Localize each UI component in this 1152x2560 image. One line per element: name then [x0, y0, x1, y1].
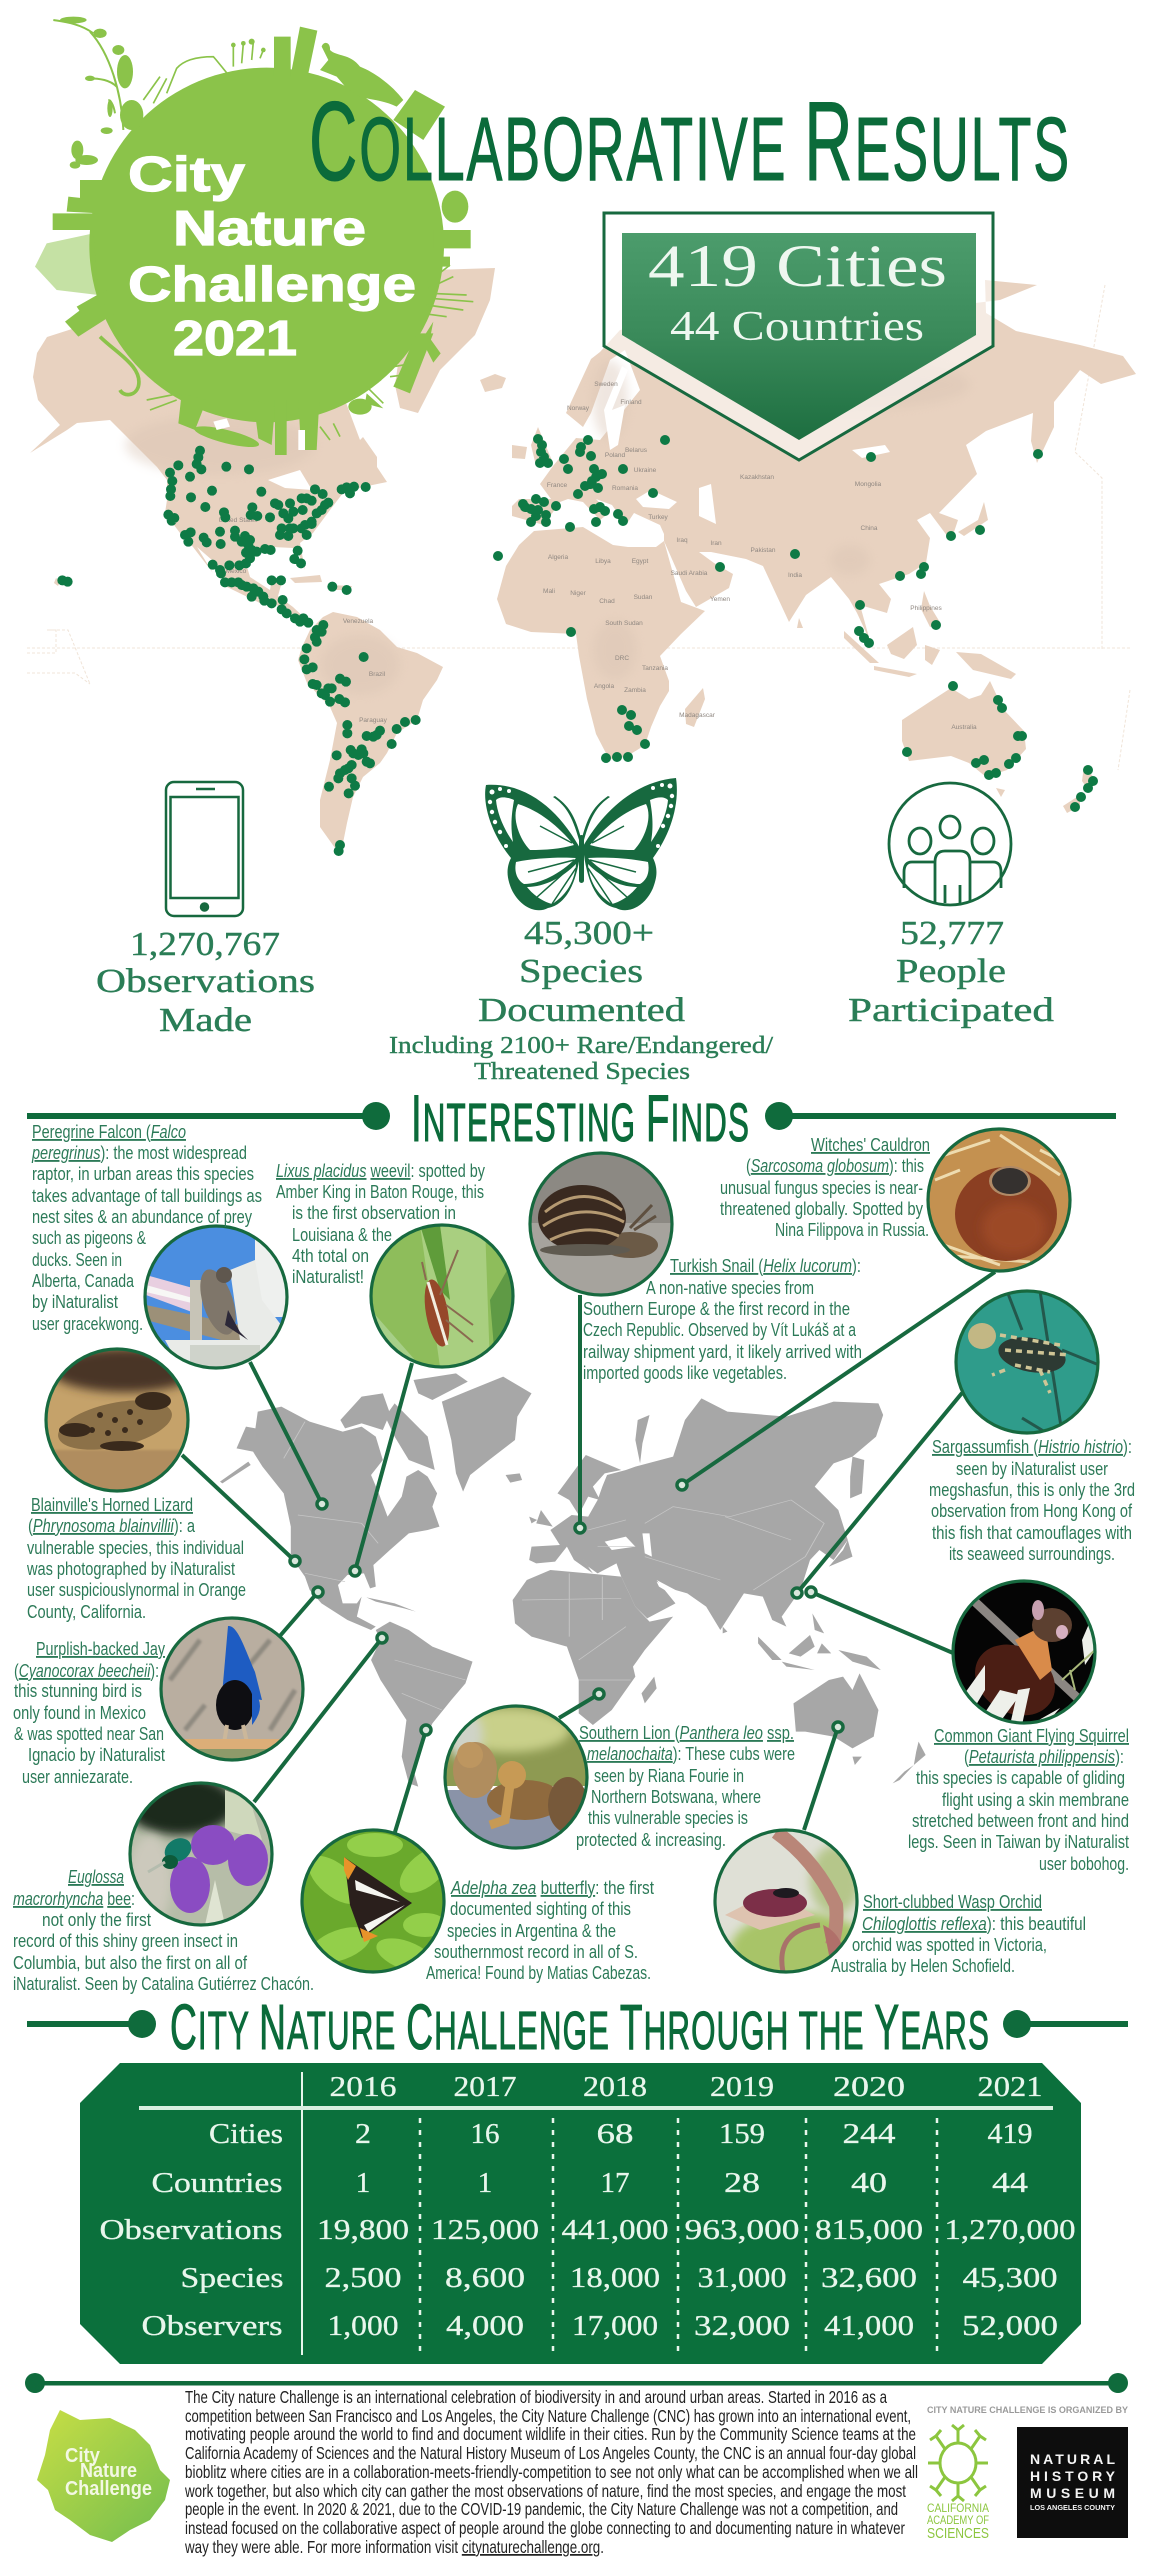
city dots: Europe, Africa, Asia, Oceania — [498, 439, 1093, 807]
table row: observations: 815,000 — [815, 2214, 923, 2246]
photo: sargassumfish — [956, 1291, 1099, 1435]
footer logo: Challenge — [65, 2478, 152, 2500]
logo wordmark: 2021 — [173, 312, 297, 366]
photo: turkish snail — [530, 1153, 672, 1295]
caption: purplish-backed jay: Ignacio by iNaturalist — [28, 1744, 165, 1765]
about paragraph: work together, but also which city can gather the most observations of nature, find the most species, and engage the most — [184, 2481, 906, 2501]
inland waters — [268, 366, 890, 524]
caption: peregrine falcon: Alberta, Canada — [32, 1270, 135, 1291]
caption: turkish snail: railway shipment yard, it likely arrived with — [583, 1341, 862, 1362]
caption: short-clubbed wasp orchid: orchid was spotted in Victoria, — [852, 1934, 1047, 1955]
California Academy of Sciences logo — [927, 2425, 989, 2542]
logo wordmark: City — [128, 148, 245, 202]
small country labels: Venezuela — [343, 618, 374, 625]
small country labels: Madagascar — [679, 712, 716, 719]
small country labels: Algeria — [548, 554, 569, 561]
table row: observations: 1,270,000 — [944, 2214, 1076, 2246]
about paragraph: California Academy of Sciences and the Natural History Museum of Los Angeles County, the CNC is an annual four-day global — [185, 2443, 916, 2463]
table row: countries: Countries — [152, 2167, 282, 2199]
heading: City Nature Challenge Through the Years: CITY NATURE CHALLENGE THROUGH THE YEARS — [170, 1991, 990, 2063]
small country labels: Egypt — [632, 558, 649, 565]
small country labels: India — [788, 572, 802, 579]
small country labels: Pakistan — [751, 547, 776, 554]
table row: observations: 963,000 — [684, 2214, 800, 2246]
stat: observations: 1,270,767 — [130, 926, 280, 963]
caption: lixus weevil: iNaturalist! — [292, 1266, 364, 1287]
caption: euglossa bee: macrorhyncha bee: — [13, 1888, 135, 1909]
photo: witches cauldron fungus — [928, 1129, 1070, 1271]
caption: peregrine falcon: nest sites & an abundance of prey — [32, 1206, 253, 1227]
darker land shading — [125, 360, 970, 695]
about paragraph: instead focused on the collaborative aspect of people around the globe connecting to and documenting nature in whatever — [185, 2518, 905, 2538]
Natural History Museum logo: NATURAL — [1030, 2451, 1115, 2467]
heading: Interesting Finds: INTERESTING FINDS — [411, 1081, 750, 1155]
table header years: 2021 — [978, 2071, 1042, 2103]
stat: observations: Made — [159, 1002, 252, 1039]
small country labels: France — [547, 482, 567, 489]
caption: euglossa bee: Columbia, but also the first on all of — [13, 1952, 248, 1973]
about paragraph: bioblitz where cities are in a collaboration-meets-friendly-competition to see not only what can be accomplished when we all — [185, 2462, 918, 2482]
caption: witches cauldron: Witches' Cauldron — [811, 1134, 930, 1155]
table row: countries: 17 — [600, 2167, 630, 2199]
footer logo: City — [65, 2445, 101, 2467]
organizer credit line: CITY NATURE CHALLENGE IS ORGANIZED BY — [927, 2405, 1129, 2416]
caption: horned lizard: (Phrynosoma blainvillii): a — [28, 1515, 196, 1536]
stat: species: 45,300+ — [524, 915, 654, 952]
small country labels: Belarus — [625, 447, 648, 454]
about paragraph: motivating people around the world to find and document wildlife in their cities. Run by the Community Science teams at the — [185, 2424, 916, 2444]
table row: cities: 159 — [719, 2118, 765, 2150]
leader lines and map markers — [182, 1272, 995, 1832]
stat: species: Including 2100+ Rare/Endangered/ — [389, 1033, 773, 1059]
caption: turkish snail: Czech Republic. Observed by Vít Lukáš at a — [583, 1319, 857, 1340]
small country labels: Sudan — [634, 594, 653, 601]
caption: adelpha zea butterfly: America! Found by Matias Cabezas. — [426, 1962, 651, 1983]
table row: species: Species — [180, 2262, 284, 2294]
caption: euglossa bee: Euglossa — [68, 1866, 124, 1887]
table row: countries: 44 — [992, 2167, 1029, 2199]
small country labels: Zambia — [624, 687, 646, 694]
table row: observations: Observations — [100, 2214, 282, 2246]
callout: 419 cities, 44 countries: 419 Cities — [648, 233, 947, 299]
about paragraph — [184, 2387, 918, 2557]
caption: common giant flying squirrel: (Petaurista philippensis): — [964, 1746, 1124, 1767]
icon: butterfly — [485, 778, 677, 910]
small country labels: Iraq — [676, 537, 688, 544]
photo: short-clubbed wasp orchid — [713, 1828, 859, 1974]
caption: southern lion: melanochaita): These cubs were — [587, 1743, 795, 1764]
about paragraph: way they were able. For more information visit citynaturechallenge.org. — [184, 2537, 604, 2557]
small country labels: South Sudan — [605, 620, 643, 627]
table header years: 2018 — [583, 2071, 647, 2103]
photo: adelpha zea butterfly — [300, 1830, 458, 1978]
caption: euglossa bee: iNaturalist. Seen by Catalina Gutiérrez Chacón. — [13, 1973, 314, 1994]
small country labels: Kazakhstan — [740, 474, 774, 481]
table row: cities: 16 — [470, 2118, 500, 2150]
small country labels: DRC — [615, 655, 629, 662]
caption: lixus weevil — [276, 1160, 486, 1287]
stat: species: Documented — [478, 992, 685, 1029]
caption: lixus weevil: Lixus placidus weevil: spotted by — [276, 1160, 486, 1181]
small country labels: Romania — [612, 485, 638, 492]
caption: short-clubbed wasp orchid — [831, 1891, 1086, 1976]
Natural History Museum logo: LOS ANGELES COUNTY — [1030, 2505, 1115, 2512]
about paragraph: competition between San Francisco and Los Angeles, the City Nature Challenge (CNC) has grown into an international event, — [185, 2406, 911, 2426]
caption: peregrine falcon — [31, 1121, 262, 1334]
butterfly wing veins — [528, 826, 636, 904]
table row: species: 2,500 — [324, 2262, 402, 2294]
table row: countries: 1 — [356, 2167, 370, 2199]
small country labels: China — [861, 525, 878, 532]
table row: species: 32,600 — [821, 2262, 917, 2294]
logo artwork — [35, 17, 473, 455]
heading rule: through the years — [27, 2010, 1128, 2038]
photo: lixus weevil — [371, 1225, 513, 1370]
table row: cities: 244 — [842, 2118, 896, 2150]
table row: observers — [142, 2310, 1058, 2342]
callout: 419 cities, 44 countries — [604, 213, 993, 460]
stat: observations — [96, 926, 315, 1039]
table header years: 2019 — [710, 2071, 774, 2103]
table row: cities: 68 — [596, 2118, 634, 2150]
footer logo — [37, 2410, 170, 2542]
table row: observers: 17,000 — [572, 2310, 658, 2342]
stat: people — [848, 915, 1054, 1029]
stat: people: People — [896, 953, 1006, 990]
caption: adelpha zea butterfly: southernmost record in all of S. — [434, 1941, 638, 1962]
table row: cities — [209, 2118, 1032, 2150]
caption: turkish snail: A non-native species from — [646, 1277, 814, 1298]
caption: witches cauldron: threatened globally. Spotted by — [720, 1198, 924, 1219]
table row: observations: 441,000 — [562, 2214, 668, 2246]
stat: people: 52,777 — [900, 915, 1004, 952]
caption: euglossa bee — [13, 1866, 314, 1994]
city dots: Americas — [62, 451, 416, 851]
table rules — [139, 2072, 1053, 2355]
heading rule: interesting finds — [27, 1102, 1116, 1130]
caption: horned lizard: County, California. — [27, 1601, 146, 1622]
caption: peregrine falcon: such as pigeons & — [32, 1227, 146, 1248]
caption: purplish-backed jay: (Cyanocorax beecheii): — [14, 1660, 159, 1681]
caption: euglossa bee: not only the first — [42, 1909, 151, 1930]
faint map grid lines — [27, 285, 1130, 770]
table row: observers: 1,000 — [328, 2310, 398, 2342]
table row: cities: 2 — [355, 2118, 371, 2150]
table row: countries: 40 — [851, 2167, 887, 2199]
caption: lixus weevil: is the first observation in — [292, 1202, 456, 1223]
stat: people: Participated — [848, 992, 1054, 1029]
small country labels: Niger — [570, 590, 587, 597]
small country labels: United States — [218, 517, 258, 524]
Natural History Museum logo: HISTORY — [1030, 2468, 1116, 2484]
caption: witches cauldron: (Sarcosoma globosum): this — [746, 1155, 924, 1176]
caption: southern lion — [576, 1722, 795, 1850]
small country labels: Tanzania — [642, 665, 668, 672]
table row: observations: 19,800 — [317, 2214, 409, 2246]
grey world map — [220, 1373, 926, 1787]
caption: purplish-backed jay: & was spotted near San — [14, 1723, 164, 1744]
footer rule — [25, 2373, 1128, 2393]
caption: horned lizard: user suspiciouslynormal in Orange — [27, 1579, 246, 1600]
caption: southern lion: Northern Botswana, where — [591, 1786, 761, 1807]
caption: witches cauldron — [720, 1134, 930, 1240]
table header years: 2017 — [454, 2071, 516, 2103]
table row: cities: 419 — [988, 2118, 1032, 2150]
small country labels: Angola — [594, 683, 614, 690]
beige world map with city dots — [27, 268, 1136, 852]
photo: purplish-backed jay — [161, 1618, 303, 1761]
caption: lixus weevil: Amber King in Baton Rouge, this — [276, 1181, 484, 1202]
small country labels: Philippines — [910, 605, 942, 612]
stat: species — [389, 915, 773, 1085]
photo: peregrine falcon — [145, 1226, 290, 1368]
small country labels — [218, 381, 977, 731]
caption: peregrine falcon: takes advantage of tall buildings as — [32, 1185, 262, 1206]
caption: peregrine falcon: ducks. Seen in — [32, 1249, 122, 1270]
caption: sargassumfish: seen by iNaturalist user — [956, 1458, 1108, 1479]
caption: adelpha zea butterfly: Adelpha zea butterfly: the first — [450, 1877, 654, 1898]
caption: adelpha zea butterfly: documented sighting of this — [450, 1898, 631, 1919]
caption: lixus weevil: Louisiana & the — [292, 1224, 392, 1245]
caption: horned lizard: was photographed by iNaturalist — [26, 1558, 235, 1579]
table row: cities: Cities — [209, 2118, 283, 2150]
photo: common giant flying squirrel — [953, 1581, 1095, 1730]
Natural History Museum logo: MUSEUM — [1030, 2485, 1115, 2501]
land masses — [30, 268, 1136, 852]
caption: peregrine falcon: Peregrine Falcon (Falco — [32, 1121, 186, 1142]
table row: species: 45,300 — [962, 2262, 1058, 2294]
caption: southern lion: seen by Riana Fourie in — [594, 1765, 744, 1786]
small country labels: Brazil — [369, 671, 386, 678]
table header years: 2020 — [833, 2071, 905, 2103]
small country labels: Libya — [595, 558, 611, 565]
caption: lixus weevil: 4th total on — [292, 1245, 369, 1266]
icon: phone — [166, 782, 243, 916]
caption: peregrine falcon: by iNaturalist — [32, 1291, 118, 1312]
caption: witches cauldron: Nina Filippova in Russia. — [775, 1219, 929, 1240]
small country labels: Chad — [599, 598, 615, 605]
about paragraph: people in the event. In 2020 & 2021, due to the COVID-19 pandemic, the City Nature Challenge was not a competition, and — [185, 2499, 898, 2519]
caption: adelpha zea butterfly — [426, 1877, 654, 1983]
caption: peregrine falcon: peregrinus): the most widespread — [31, 1142, 247, 1163]
table row: observers: 32,000 — [694, 2310, 790, 2342]
small country labels: Finland — [620, 399, 642, 406]
table row: species: 31,000 — [698, 2262, 786, 2294]
stat: species: Species — [519, 953, 643, 990]
caption: southern lion: Southern Lion (Panthera leo ssp. — [579, 1722, 794, 1743]
caption: sargassumfish — [929, 1436, 1135, 1564]
table row: observers: Observers — [142, 2310, 282, 2342]
caption: short-clubbed wasp orchid: Short-clubbed Wasp Orchid — [863, 1891, 1042, 1912]
small country labels: Ukraine — [634, 467, 657, 474]
California Academy of Sciences logo: SCIENCES — [927, 2525, 989, 2542]
caption: purplish-backed jay: this stunning bird is — [14, 1680, 142, 1701]
small country labels: Turkey — [648, 514, 669, 521]
small country labels: Mexico — [226, 568, 247, 575]
caption: purplish-backed jay: only found in Mexico — [13, 1702, 146, 1723]
callout: 419 cities, 44 countries: 44 Countries — [670, 304, 924, 350]
table row: countries — [152, 2167, 1029, 2199]
caption: horned lizard: Blainville's Horned Lizard — [31, 1494, 193, 1515]
caption: horned lizard: vulnerable species, this individual — [27, 1537, 244, 1558]
caption: turkish snail: Southern Europe & the first record in the — [583, 1298, 850, 1319]
small country labels: Sweden — [594, 381, 618, 388]
small country labels: Iran — [710, 540, 722, 547]
logo wordmark: Challenge — [128, 258, 416, 312]
small country labels: Paraguay — [359, 717, 388, 724]
stat: species: Threatened Species — [474, 1059, 690, 1085]
caption: turkish snail: imported goods like vegetables. — [583, 1362, 787, 1383]
table header years — [330, 2071, 1042, 2103]
caption: short-clubbed wasp orchid: Chiloglottis reflexa): this beautiful — [862, 1913, 1086, 1934]
table row: observers: 52,000 — [962, 2310, 1058, 2342]
photo: euglossa bee — [125, 1775, 272, 1925]
caption: purplish-backed jay: user anniezarate. — [22, 1766, 133, 1787]
caption: adelpha zea butterfly: species in Argentina & the — [447, 1920, 616, 1941]
caption: peregrine falcon: raptor, in urban areas this species — [32, 1163, 254, 1184]
logo wordmark: Nature — [173, 202, 366, 256]
caption: purplish-backed jay: Purplish-backed Jay — [36, 1638, 166, 1659]
footer logo: Nature — [80, 2460, 137, 2482]
caption: short-clubbed wasp orchid: Australia by Helen Schofield. — [831, 1955, 1015, 1976]
caption: euglossa bee: record of this shiny green insect in — [13, 1930, 238, 1951]
caption: common giant flying squirrel — [908, 1725, 1129, 1874]
California Academy of Sciences logo: CALIFORNIA — [927, 2501, 989, 2515]
small country labels: Poland — [605, 452, 625, 459]
caption: horned lizard — [26, 1494, 246, 1622]
table row: observations: 125,000 — [431, 2214, 539, 2246]
caption: witches cauldron: unusual fungus species is near- — [720, 1177, 923, 1198]
caption: sargassumfish: Sargassumfish (Histrio histrio): — [932, 1436, 1132, 1457]
table header years: 2016 — [330, 2071, 396, 2103]
table row: observers: 41,000 — [824, 2310, 914, 2342]
caption: turkish snail — [583, 1255, 862, 1383]
table row: observations — [100, 2214, 1076, 2246]
small country labels: Australia — [951, 724, 977, 731]
City Nature Challenge 2021 logo — [35, 17, 473, 455]
table row: species: 18,000 — [570, 2262, 660, 2294]
table row: species: 8,600 — [445, 2262, 525, 2294]
about paragraph: The City nature Challenge is an international celebration of biodiversity in and around urban areas. Started in 2016 as a — [185, 2387, 887, 2407]
small country labels: Mali — [543, 588, 555, 595]
table row: countries: 1 — [478, 2167, 492, 2199]
panel: results by year table — [80, 2063, 1081, 2364]
butterfly wing patches — [488, 783, 674, 904]
logo wordmark — [128, 148, 416, 366]
Natural History Museum logo — [1017, 2427, 1128, 2538]
caption: turkish snail: Turkish Snail (Helix lucorum): — [670, 1255, 861, 1276]
small country labels: Mongolia — [855, 481, 882, 488]
table row: observers: 4,000 — [446, 2310, 524, 2342]
table row: countries: 28 — [724, 2167, 760, 2199]
caption: southern lion: this vulnerable species is — [588, 1807, 748, 1828]
icon: people — [889, 783, 1011, 905]
small country labels: Yemen — [710, 596, 730, 603]
small country labels: Saudi Arabia — [671, 570, 708, 577]
California Academy of Sciences logo: ACADEMY OF — [927, 2513, 989, 2527]
photo: horned lizard — [46, 1348, 200, 1492]
caption: purplish-backed jay — [13, 1638, 166, 1787]
photo: southern lion — [445, 1706, 588, 1850]
small country labels: Norway — [567, 405, 590, 412]
table row: species — [180, 2262, 1058, 2294]
stat: observations: Observations — [96, 963, 315, 1000]
caption: peregrine falcon: user gracekwong. — [32, 1313, 143, 1334]
caption: southern lion: protected & increasing. — [576, 1829, 726, 1850]
